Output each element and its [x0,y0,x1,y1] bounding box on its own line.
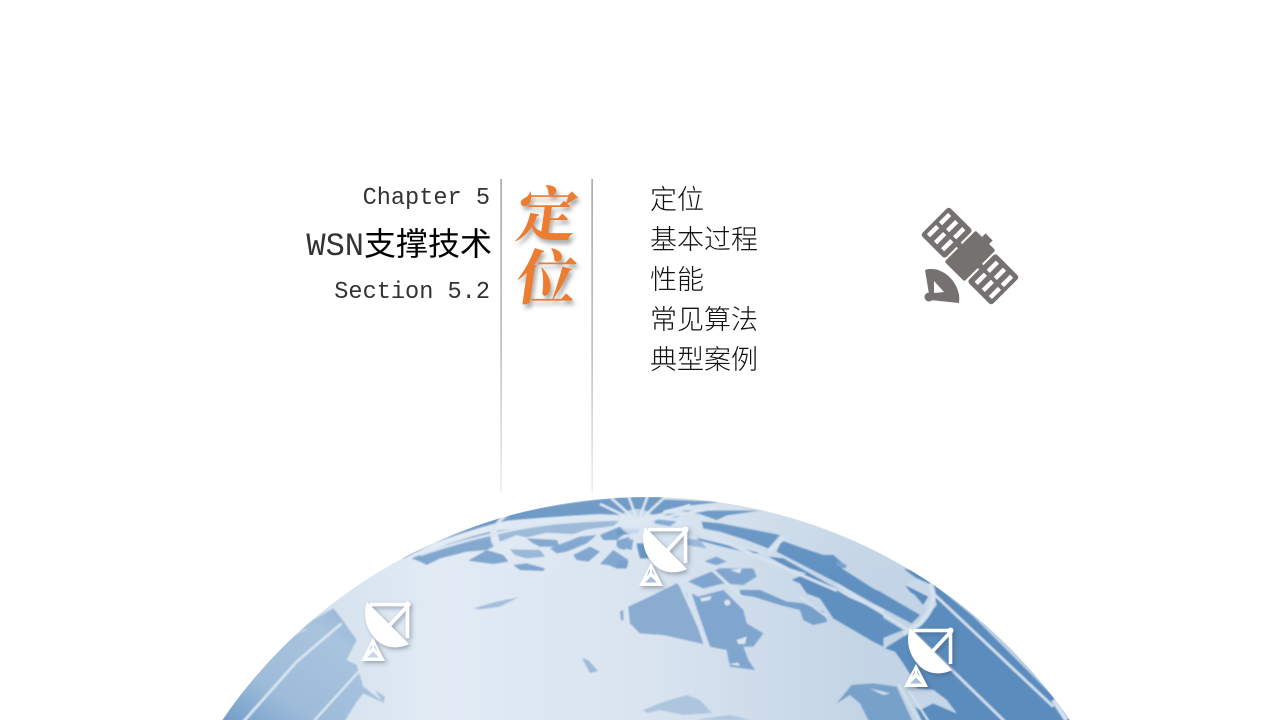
heading: WSN支撑技术: WSN支撑技术 [306,228,492,265]
topic list: 常见算法 [650,305,758,335]
icon: satellite [919,202,1024,307]
calligraphic title: 定位: 位 [512,246,582,312]
east, rim strip [837,561,1073,720]
calligraphic title: 定位 [512,183,582,312]
polar rays and meridian [420,495,715,555]
icon: dish top [639,526,688,586]
heading: section: Section 5.2 [334,279,490,306]
topic list: 定位 [650,185,704,215]
icon: dish left [361,602,410,661]
topic list [650,185,758,375]
topic list: 典型案例 [650,345,758,375]
arctic and central continents [617,497,883,670]
topic list: 基本过程 [650,225,758,255]
heading: chapter: Chapter 5 [363,185,490,212]
divider lines [500,179,593,492]
topic list: 性能 [650,265,704,295]
globe with land masses [222,179,1070,720]
pale islands, centre [582,658,750,720]
calligraphic title: 定位: 定 [512,183,582,249]
icon: dish right [904,628,954,687]
west coast land [220,608,385,720]
arctic, left half [402,497,663,609]
